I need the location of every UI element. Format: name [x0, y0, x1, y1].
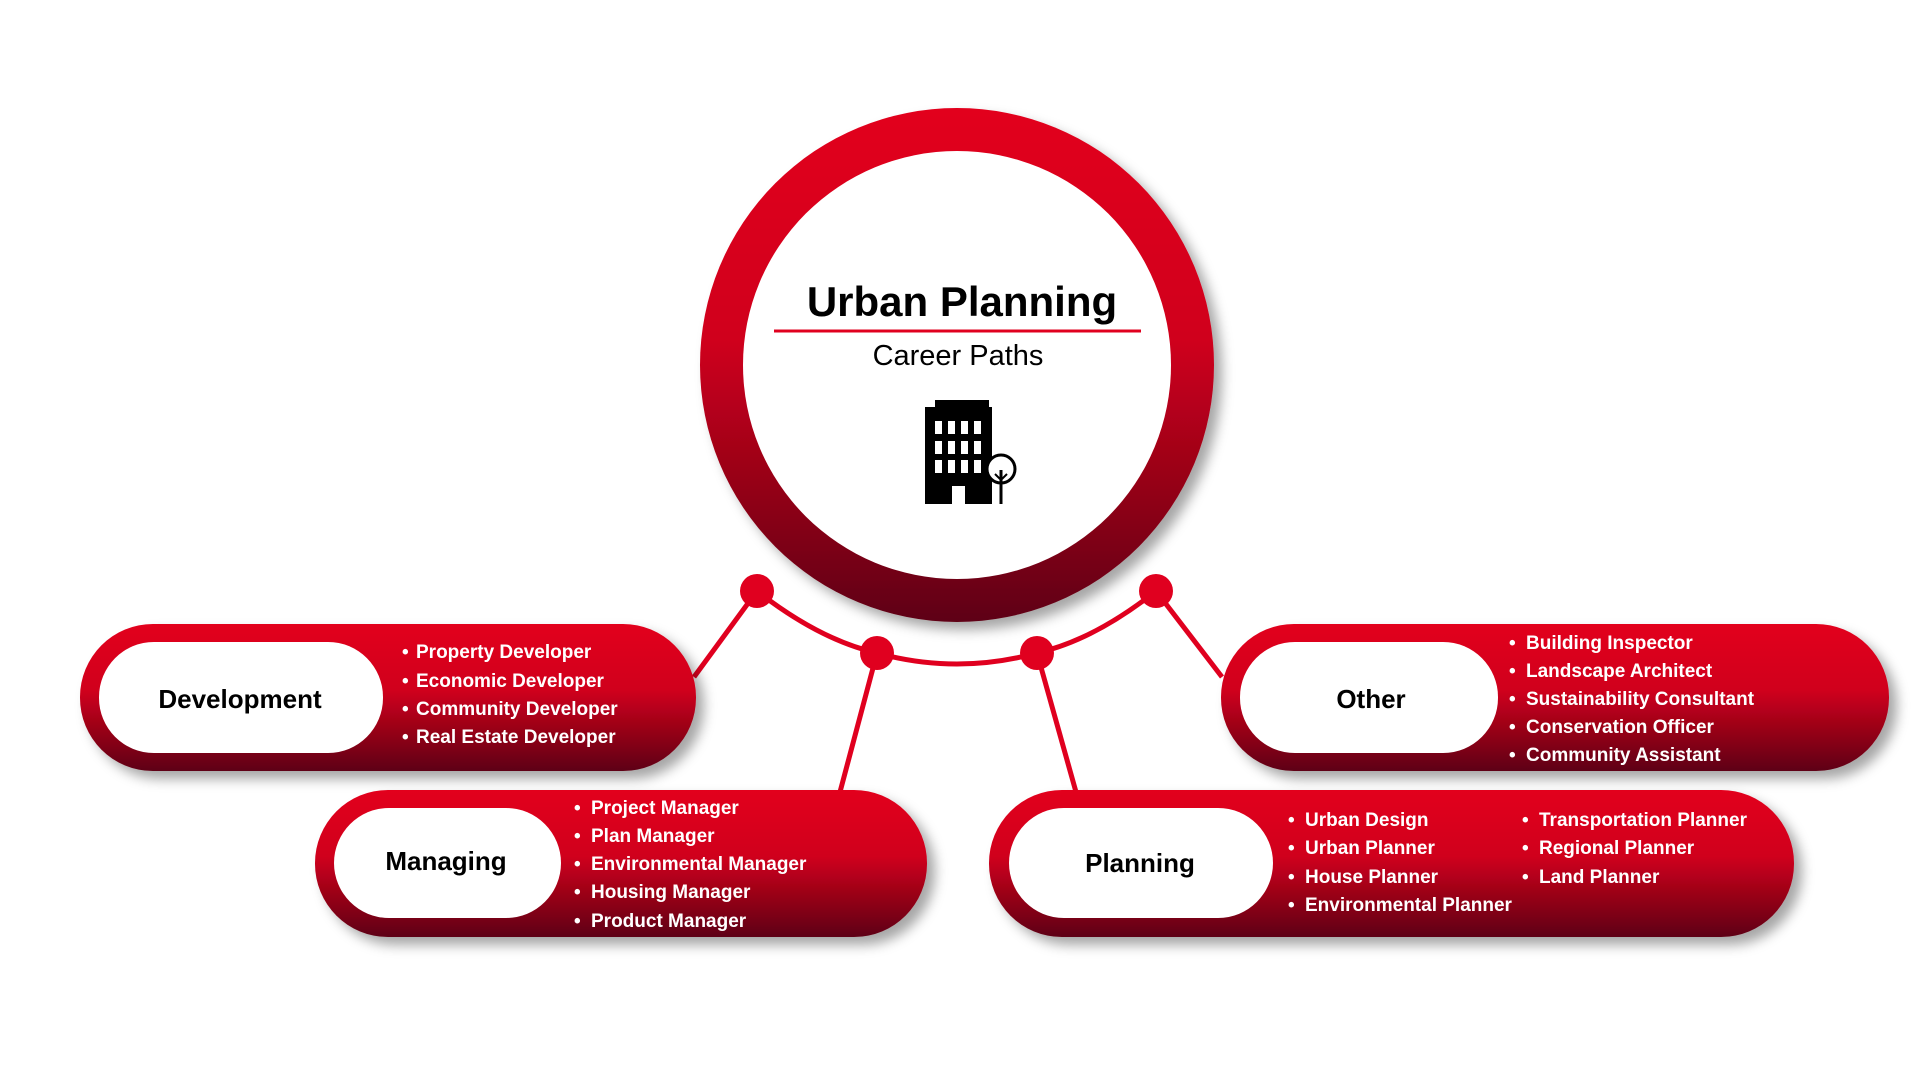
- panel: planning: •: [1288, 895, 1295, 916]
- panel: planning: Transportation Planner: [1539, 810, 1748, 831]
- panel: managing: Housing Manager: [591, 882, 751, 903]
- panel: managing: •: [574, 882, 581, 903]
- panel: planning: •: [1288, 810, 1295, 831]
- connectors: [694, 591, 1222, 792]
- panel: other: Conservation Officer: [1526, 717, 1715, 738]
- panel: other: •: [1509, 633, 1516, 654]
- panel: planning: Urban Planner: [1305, 838, 1435, 859]
- panel: other: •: [1509, 717, 1516, 738]
- panel: managing: •: [574, 911, 581, 932]
- panel: managing: Project Manager: [591, 798, 739, 819]
- panel: other: •: [1509, 689, 1516, 710]
- panel: development: Real Estate Developer: [416, 727, 616, 748]
- panel: planning: •: [1288, 867, 1295, 888]
- center circle: [700, 108, 1214, 622]
- panel: planning: Regional Planner: [1539, 838, 1695, 859]
- panel: other: [1221, 624, 1889, 771]
- panel: planning: •: [1522, 810, 1529, 831]
- panel: planning: House Planner: [1305, 867, 1439, 888]
- subtitle: Career Paths: [873, 340, 1043, 372]
- panel: other: Landscape Architect: [1526, 661, 1713, 682]
- panel: planning: Environmental Planner: [1305, 895, 1513, 916]
- panel: managing: •: [574, 826, 581, 847]
- panel: other: Building Inspector: [1526, 633, 1693, 654]
- panel: development: Economic Developer: [416, 671, 605, 692]
- panel: other: Sustainability Consultant: [1526, 689, 1755, 710]
- panel: other: •: [1509, 745, 1516, 766]
- panel: development: •: [402, 642, 409, 663]
- panel: managing: Product Manager: [591, 911, 747, 932]
- panel: planning: Urban Design: [1305, 810, 1429, 831]
- panel: planning: •: [1522, 838, 1529, 859]
- panel: development: Community Developer: [416, 699, 618, 720]
- panel: other: Other: [1336, 684, 1406, 714]
- panel: planning: •: [1288, 838, 1295, 859]
- panel: development: [80, 624, 696, 771]
- panel: other: Community Assistant: [1526, 745, 1721, 766]
- panel: development: •: [402, 699, 409, 720]
- title: Urban Planning: [807, 278, 1117, 325]
- panel: planning: Planning: [1085, 848, 1195, 878]
- icon: building with tree: [925, 400, 1015, 504]
- panel: development: Property Developer: [416, 642, 592, 663]
- panel: managing: Environmental Manager: [591, 854, 807, 875]
- panel: planning: Land Planner: [1539, 867, 1660, 888]
- panel: managing: •: [574, 798, 581, 819]
- panel: managing: Plan Manager: [591, 826, 715, 847]
- dots: [740, 574, 1173, 670]
- panel: managing: [315, 790, 927, 937]
- panel: development: Development: [158, 684, 322, 714]
- panel: development: •: [402, 727, 409, 748]
- panel: other: •: [1509, 661, 1516, 682]
- panel: managing: •: [574, 854, 581, 875]
- panel: planning: •: [1522, 867, 1529, 888]
- panel: development: •: [402, 671, 409, 692]
- panel: managing: Managing: [385, 846, 507, 876]
- panel: planning: [989, 790, 1794, 937]
